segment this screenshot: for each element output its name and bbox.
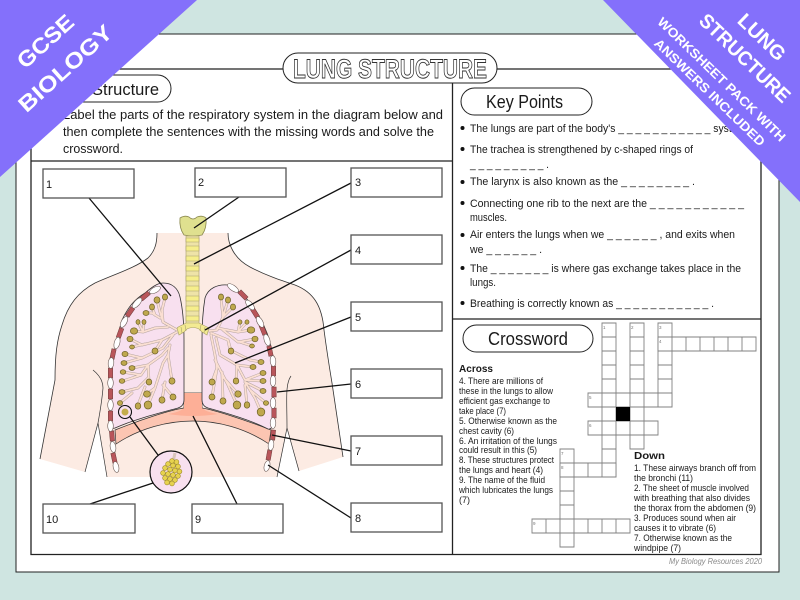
across clues: which lubricates the lungs	[458, 485, 553, 496]
key points list	[460, 123, 749, 310]
clue numbers: 2	[631, 325, 634, 330]
heading: key points: Key Points	[486, 92, 563, 112]
across clues: the lungs and heart (4)	[459, 465, 543, 476]
label box 1	[43, 169, 134, 198]
clue numbers: 8	[561, 465, 564, 470]
down clues: causes it to vibrate (6)	[634, 523, 716, 534]
label box 6	[351, 369, 442, 398]
key points list: The _ _ _ _ _ _ _ is where gas exchange takes place in the	[470, 263, 741, 275]
clue numbers: 7	[561, 451, 564, 456]
down clues: the bronchi (11)	[634, 473, 693, 484]
instructions: Label the parts of the respiratory system in the diagram below and	[63, 108, 443, 122]
ribs right	[226, 282, 276, 472]
key points list: _ _ _ _ _ _ _ _ _ .	[469, 159, 549, 171]
label box 6: 6	[355, 379, 361, 391]
right lung	[202, 285, 273, 429]
across clues	[458, 363, 557, 506]
larynx	[180, 216, 206, 236]
title: LUNG STRUCTURE	[293, 54, 487, 84]
across clues: (7)	[459, 495, 470, 506]
label box 3: 3	[355, 177, 361, 189]
clue numbers: 6	[589, 423, 592, 428]
across clues: 5. Otherwise known as the	[459, 416, 557, 427]
instructions: crossword.	[63, 142, 123, 156]
label box 2: 2	[198, 177, 204, 189]
down clues: 7. Otherwise known as the	[634, 533, 732, 544]
left lung	[110, 283, 184, 428]
label box 5	[351, 302, 442, 331]
clue numbers: 1	[603, 325, 606, 330]
ribs left	[108, 285, 162, 473]
clue numbers	[533, 325, 662, 526]
banner: worksheet pack: STRUCTURE	[694, 10, 794, 108]
key points list: we _ _ _ _ _ _ .	[469, 244, 542, 256]
label box 10: 10	[46, 514, 58, 526]
label box 10	[43, 504, 135, 533]
panel: worksheet frame	[31, 69, 761, 554]
armpit lines	[85, 370, 299, 477]
label box 9: 9	[195, 514, 201, 526]
black square	[616, 407, 630, 421]
clue numbers: 3	[659, 325, 662, 330]
down clues: the thorax from the abdomen (9)	[634, 503, 756, 514]
down clues: Down	[634, 450, 665, 462]
down clues: with breathing that also divides	[633, 493, 750, 504]
clue numbers: 4	[659, 339, 662, 344]
banner: worksheet pack: WORKSHEET PACK WITH	[655, 14, 789, 144]
down clues: 2. The sheet of muscle involved	[634, 483, 749, 494]
banner: worksheet pack: ANSWERS INCLUDED	[651, 36, 768, 149]
label box 1: 1	[46, 179, 52, 191]
key points list: muscles.	[470, 212, 507, 224]
key points list: lungs.	[470, 277, 496, 289]
heading: crossword: Crossword	[488, 329, 568, 349]
credit: My Biology Resources 2020	[669, 557, 763, 566]
label box 7	[351, 436, 442, 465]
key points list: Connecting one rib to the next are the _ _ _ _ _ _ _ _ _ _ _	[470, 198, 745, 210]
key points list: The larynx is also known as the _ _ _ _ _ _ _ _ .	[470, 176, 695, 188]
alveoli small circle	[118, 406, 132, 418]
key points list: Air enters the lungs when we _ _ _ _ _ _ , and exits when	[470, 229, 735, 241]
right bronchial tree	[209, 294, 269, 416]
heading: crossword	[463, 325, 593, 352]
alveoli magnified circle	[150, 451, 192, 493]
clue numbers: 5	[589, 395, 592, 400]
heading: key points	[461, 88, 592, 115]
panel: diagram	[40, 216, 343, 493]
across clues: 8. These structures protect	[459, 455, 554, 466]
across clues: 6. An irritation of the lungs	[459, 436, 557, 447]
across clues: 9. The name of the fluid	[459, 475, 545, 486]
label box 7: 7	[355, 446, 361, 458]
heading: lung structure: Lung Structure	[51, 81, 159, 99]
key points list: Breathing is correctly known as _ _ _ _ _ _ _ _ _ _ _ .	[470, 298, 714, 310]
banner: GCSE Biology: BIOLOGY	[13, 19, 118, 117]
banner: GCSE Biology: GCSE	[12, 9, 79, 73]
label box 5: 5	[355, 312, 361, 324]
left bronchial tree	[117, 294, 177, 409]
clue numbers: 9	[533, 521, 536, 526]
across clues: take place (7)	[459, 406, 506, 417]
across clues: 4. There are millions of	[459, 376, 543, 387]
banner: worksheet pack	[603, 0, 800, 202]
across clues: chest cavity (6)	[459, 426, 514, 437]
label box 9	[192, 504, 283, 533]
label box 8	[351, 503, 442, 532]
instructions: then complete the sentences with the missing words and solve the	[63, 125, 434, 139]
body torso	[40, 233, 343, 477]
across clues: these in the lungs to allow	[459, 386, 553, 397]
label box 3	[351, 168, 442, 197]
label box 2	[195, 168, 286, 197]
banner: worksheet pack: LUNG	[733, 10, 790, 66]
down clues: 1. These airways branch off from	[634, 463, 756, 474]
banner: GCSE Biology	[0, 0, 197, 177]
crossword grid	[532, 323, 756, 547]
across clues: Across	[459, 363, 493, 375]
leader lines	[89, 183, 351, 518]
down clues: 3. Produces sound when air	[634, 513, 736, 524]
zoom connector	[130, 417, 158, 455]
bullets	[460, 126, 464, 305]
key points list: The trachea is strengthened by c-shaped rings of	[470, 144, 694, 156]
trachea	[177, 236, 209, 335]
across clues: could result in this (5)	[459, 445, 537, 456]
across clues: efficient gas exchange to	[459, 396, 550, 407]
instructions	[63, 108, 443, 156]
body outline	[40, 233, 343, 459]
diaphragm	[115, 393, 271, 444]
key points list: The lungs are part of the body's _ _ _ _ _ _ _ _ _ _ _ system.	[470, 123, 749, 135]
label box 8: 8	[355, 513, 361, 525]
down clues	[633, 450, 756, 554]
heading: lung structure	[46, 75, 171, 102]
label box 4	[351, 235, 442, 264]
label box 4: 4	[355, 245, 361, 257]
down clues: windpipe (7)	[633, 543, 681, 554]
